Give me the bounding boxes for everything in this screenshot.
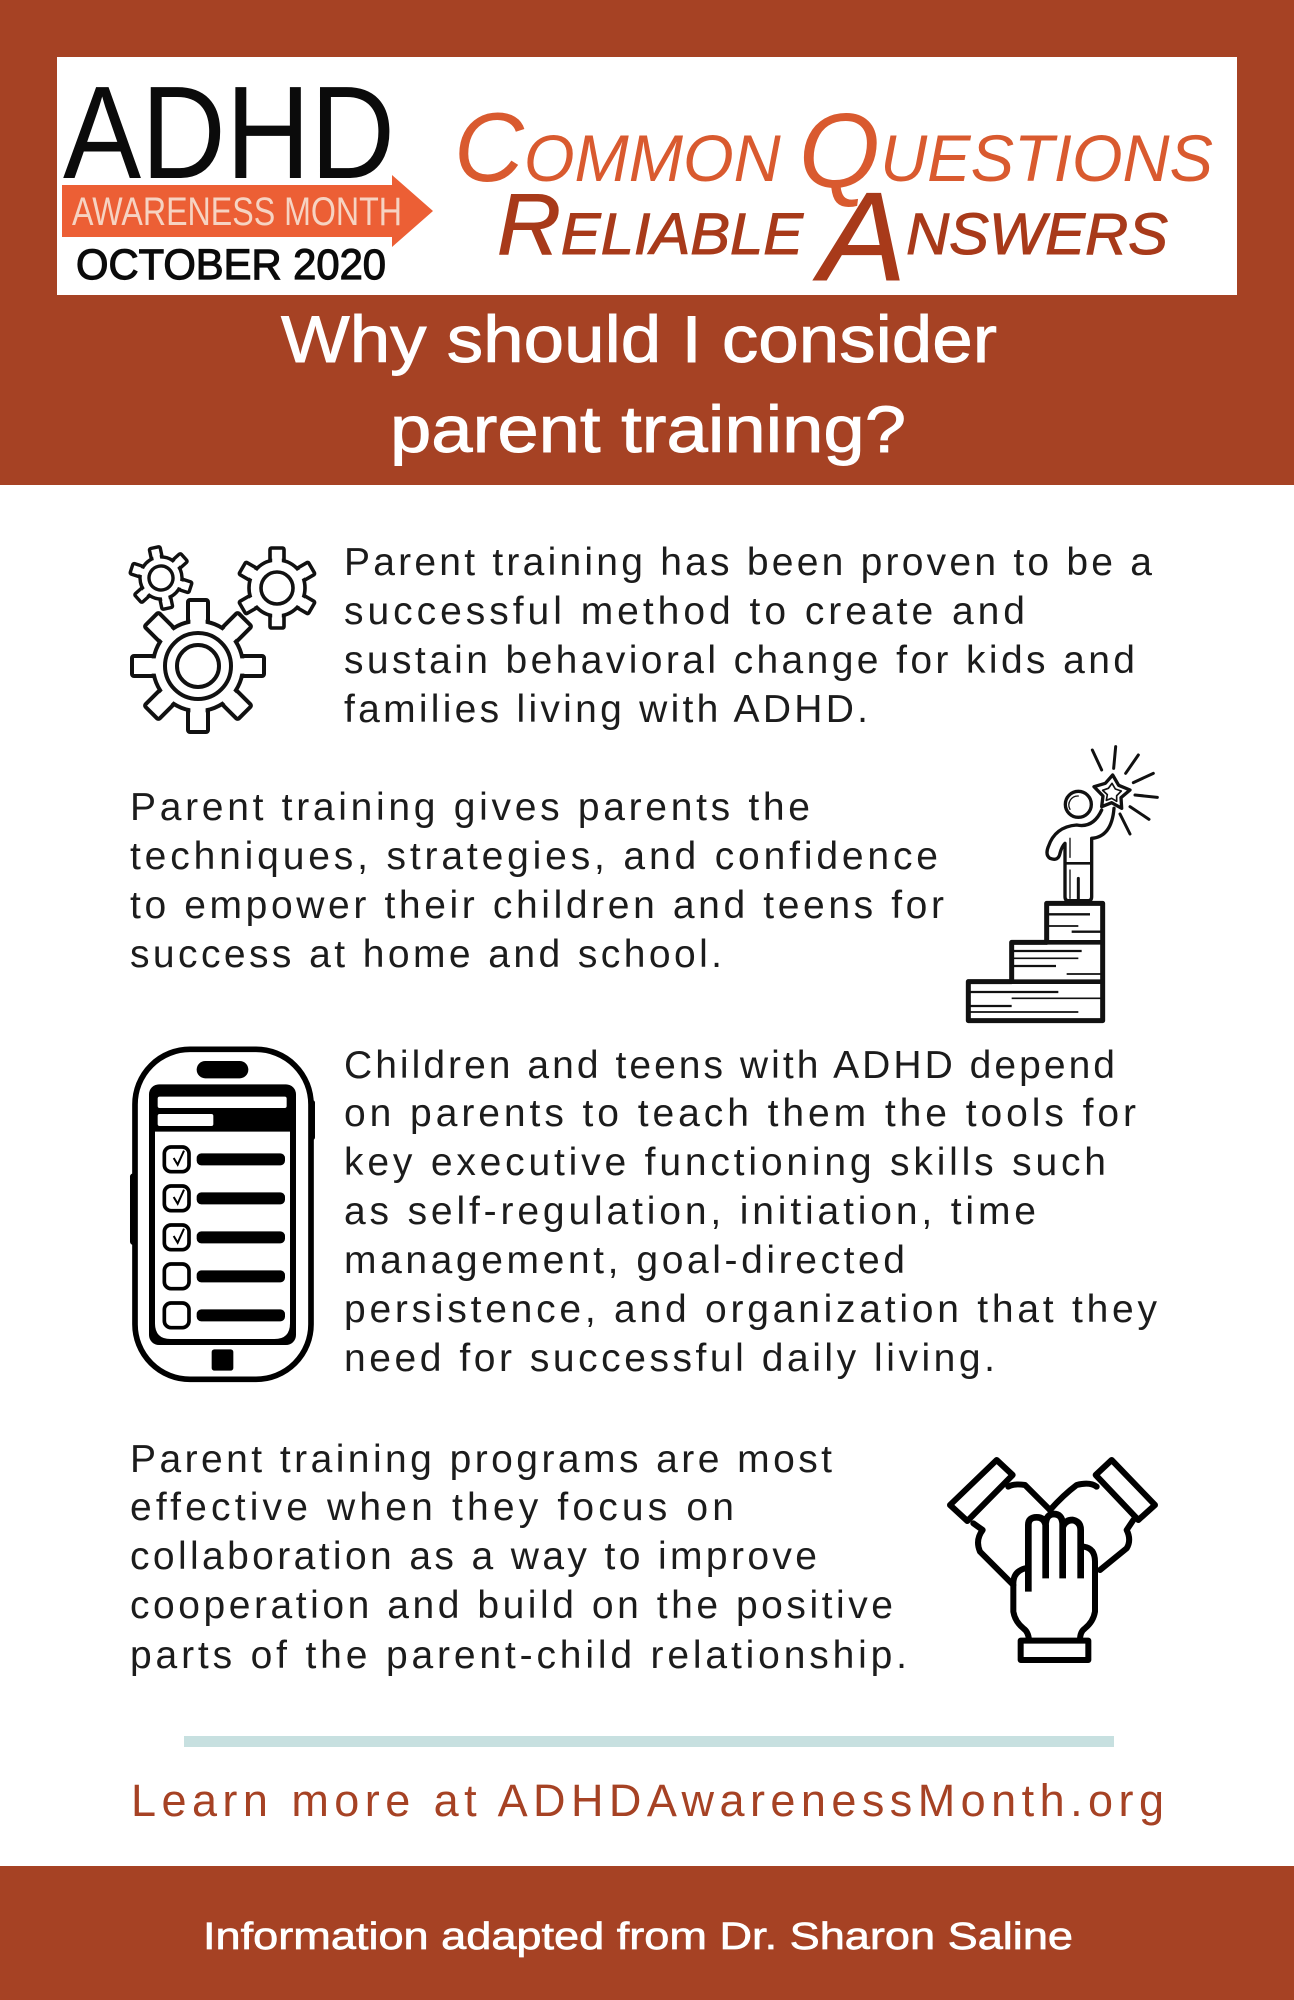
text block 3: management, goal-directed [344, 1239, 905, 1282]
footer band [0, 1866, 1294, 2000]
banner heading: reliable answers: A [812, 166, 906, 307]
text block 2 [130, 786, 944, 976]
logo: awareness month arrow: AWARENESS MONTH [72, 190, 402, 234]
text block 3: Children and teens with ADHD depend [344, 1044, 1115, 1087]
logo: October 2020: OCTOBER 2020 [76, 241, 386, 289]
text block 3: key executive functioning skills such [344, 1141, 1106, 1184]
banner heading: common questions: Q [799, 92, 880, 210]
text block 2: success at home and school. [130, 933, 722, 976]
title: Why should I consider [281, 302, 997, 376]
logo: ADHD: ADHD [63, 59, 395, 206]
text block 4: effective when they focus on [130, 1486, 734, 1529]
icon: person on stairs reaching for star [968, 747, 1157, 1021]
logo: awareness month arrow [62, 175, 433, 247]
icon: phone checklist [130, 1049, 315, 1379]
icon: gears [126, 542, 315, 732]
header band [0, 0, 1294, 485]
divider [184, 1736, 1114, 1747]
title: parent training? [390, 392, 906, 466]
text block 1: sustain behavioral change for kids and [344, 639, 1135, 682]
banner heading: reliable answers: NSWERS [906, 202, 1168, 267]
text block 4 [130, 1438, 907, 1677]
text block 2: to empower their children and teens for [130, 884, 944, 927]
icon: stacked hands [950, 1460, 1155, 1660]
call to action: Learn more at ADHDAwarenessMonth.org [131, 1775, 1164, 1826]
text block 4: cooperation and build on the positive [130, 1584, 893, 1627]
text block 2: Parent training gives parents the [130, 786, 810, 829]
text block 1 [344, 541, 1152, 731]
text block 4: Parent training programs are most [130, 1438, 832, 1481]
banner heading: common questions: COMMON [454, 92, 784, 202]
text block 3 [344, 1044, 1158, 1380]
title [281, 302, 997, 466]
text block 1: successful method to create and [344, 590, 1025, 633]
footer credit: Information adapted from Dr. Sharon Saline [203, 1916, 1073, 1958]
text block 1: families living with ADHD. [344, 688, 868, 731]
text block 1: Parent training has been proven to be a [344, 541, 1152, 584]
text block 4: collaboration as a way to improve [130, 1535, 817, 1578]
banner heading: reliable answers: RELIABLE [497, 177, 796, 273]
text block 3: need for successful daily living. [344, 1337, 995, 1380]
text block 2: techniques, strategies, and confidence [130, 835, 938, 878]
text block 3: persistence, and organization that they [344, 1288, 1158, 1331]
banner [57, 57, 1237, 307]
banner heading: common questions: UESTIONS [880, 121, 1213, 195]
text block 3: on parents to teach them the tools for [344, 1092, 1136, 1135]
text block 4: parts of the parent-child relationship. [130, 1634, 907, 1677]
text block 3: as self-regulation, initiation, time [344, 1190, 1036, 1233]
